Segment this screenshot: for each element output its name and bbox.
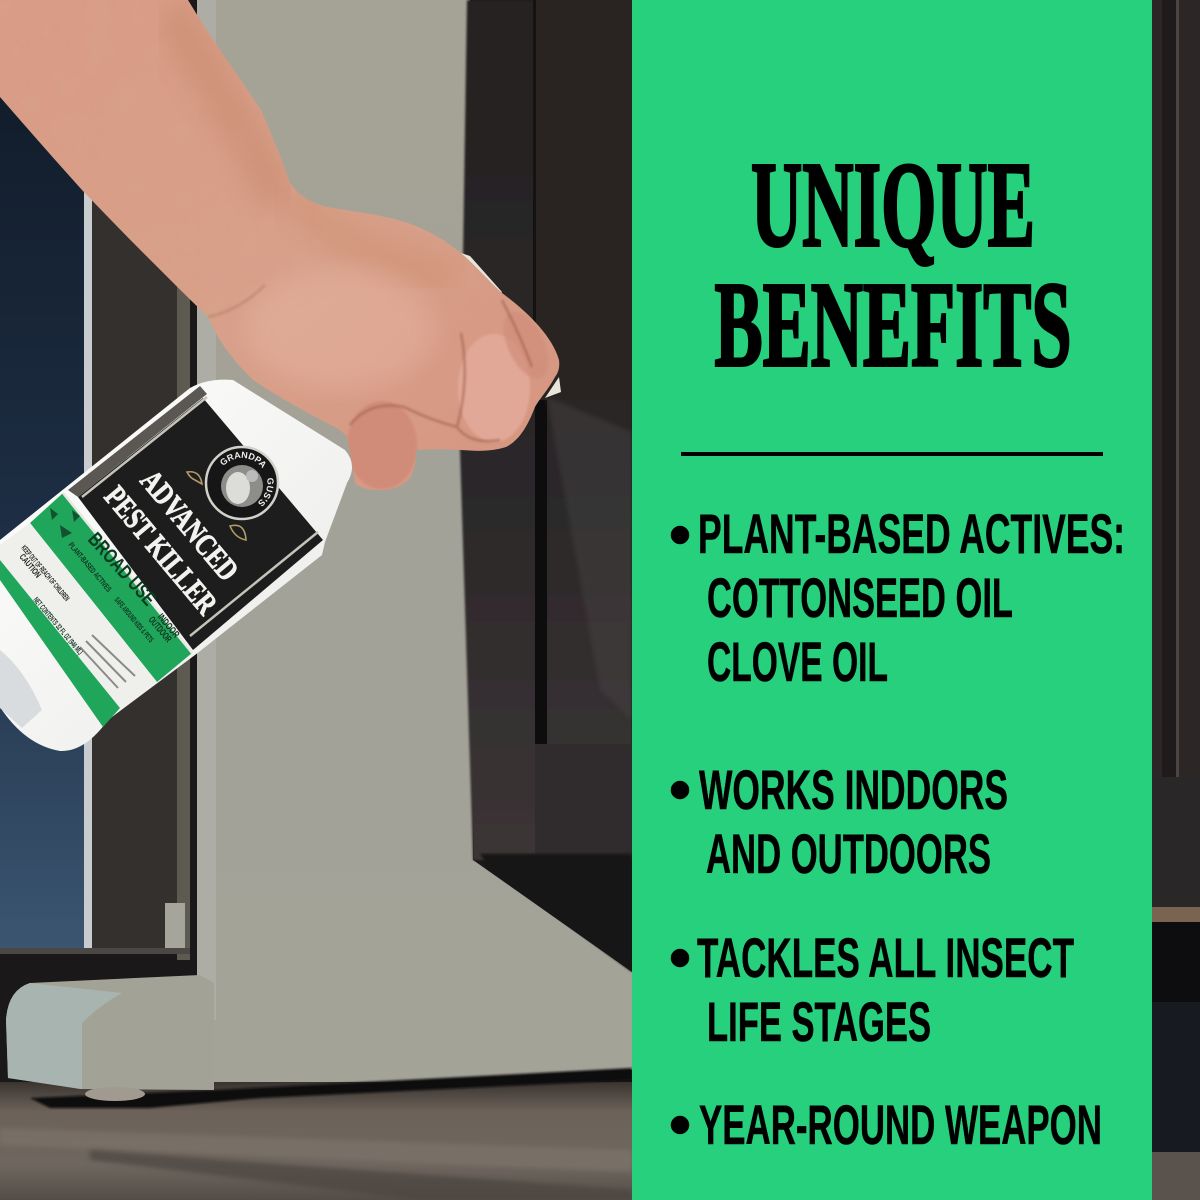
- label green text: CAUTION: [17, 552, 43, 580]
- benefit: plant-based actives: [671, 502, 1125, 693]
- label green text: BROAD USE: [83, 529, 160, 610]
- logo badge: GRANDPA: [220, 452, 266, 468]
- benefit: insect life stages: [671, 926, 1074, 1053]
- photo background: kitchen scene: [0, 0, 632, 1200]
- insect icons: [50, 508, 80, 538]
- benefit: indoors and outdoors: [671, 758, 1008, 885]
- white info band: [0, 523, 157, 710]
- benefit: plant-based actives: CLOVE OIL: [707, 630, 888, 693]
- label green text: KEEP OUT OF REACH OF CHILDREN: [19, 544, 71, 603]
- logo badge: [204, 446, 280, 520]
- logo badge: GUS'S: [258, 478, 274, 506]
- leaf marks: [187, 472, 246, 540]
- label product name: ADVANCED: [134, 463, 246, 587]
- benefit: insect life stages: LIFE STAGES: [707, 990, 931, 1053]
- green band: [30, 493, 192, 682]
- base foot: [6, 975, 214, 1090]
- bottle body: [0, 380, 352, 751]
- freckled forearm shading: [127, 236, 130, 239]
- label green text: [17, 529, 181, 657]
- dark wood cabinet: [460, 0, 632, 972]
- palm highlight: [254, 275, 430, 386]
- title: [714, 138, 1072, 392]
- floor: [0, 1068, 632, 1200]
- benefit: indoors and outdoors: AND OUTDOORS: [706, 822, 991, 885]
- grey appliance panel: [197, 0, 632, 1092]
- benefit: plant-based actives: COTTONSEED OIL: [707, 566, 1013, 629]
- label green text: PLANT-BASED ACTIVES: [66, 541, 113, 594]
- green benefits panel: [632, 0, 1152, 1200]
- fingers: [458, 334, 530, 442]
- spray bottle: [0, 380, 352, 751]
- right wood strip: [1152, 0, 1200, 1200]
- spray trigger and nozzle: [461, 253, 561, 398]
- spray mist: [547, 397, 632, 720]
- label green text: NET CONTENTS 32 FL OZ (946 ML): [31, 596, 85, 657]
- thumb: [347, 401, 417, 489]
- label green text: INDOOR: [155, 612, 181, 641]
- label product name: PEST KILLER: [98, 479, 225, 621]
- lower green band: [0, 560, 120, 727]
- hand and arm: [0, 0, 559, 490]
- label product name: [98, 463, 246, 621]
- benefit: indoors and outdoors: WORKS INDDORS: [699, 758, 1008, 821]
- divider: [681, 452, 1103, 456]
- label green text: SAFE AROUND KIDS & PETS: [112, 596, 156, 644]
- fridge door: [0, 90, 190, 960]
- label green text: OUTDOOR: [146, 615, 174, 645]
- ingredient lines: [80, 635, 135, 688]
- black label: [78, 398, 323, 650]
- creases: [350, 300, 532, 441]
